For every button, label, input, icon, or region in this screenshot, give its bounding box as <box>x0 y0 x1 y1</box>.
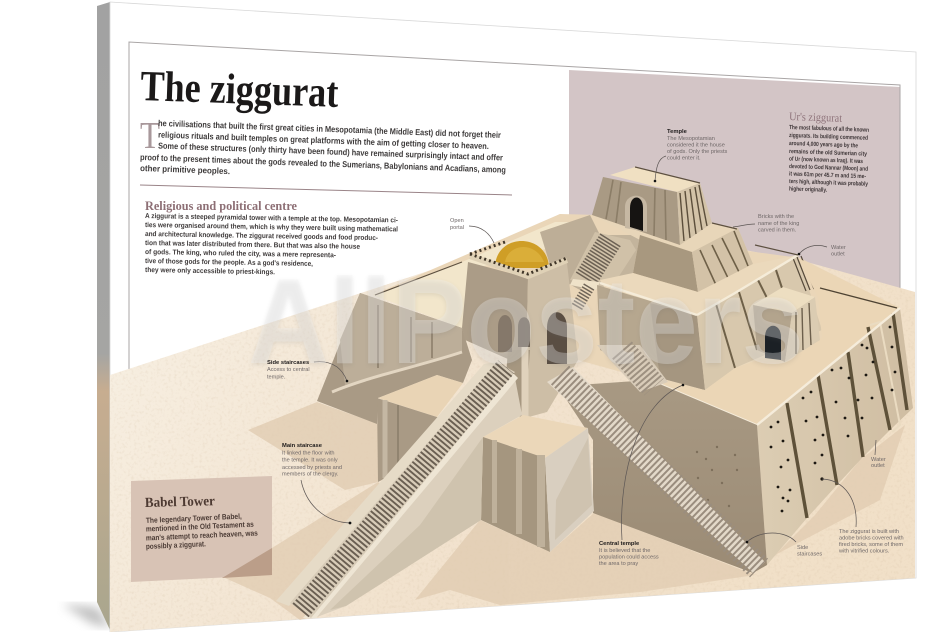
intro text: other primitive peoples. <box>140 163 230 176</box>
text block: Religious and political centre: A ziggurat is a steeped pyramidal tower with a temple at the top. Mesopotamian ci- <box>145 212 399 224</box>
label: Water outlet upper <box>798 245 846 258</box>
label: Water outlet upper: outlet <box>831 252 845 258</box>
label: adobe bricks: adobe bricks covered with <box>839 536 904 542</box>
portal block <box>753 287 820 362</box>
label: Side staircases right <box>746 533 822 558</box>
label: Bricks: Bricks with the <box>758 214 794 220</box>
text block: Ur's ziggurat: ters high, although it was probably <box>789 179 869 188</box>
intro text: religious rituals and built temples on great platforms with the aim of getting closer to heaven. <box>158 130 489 151</box>
ground shadows <box>225 402 905 620</box>
divider rule <box>140 185 512 195</box>
panel: Babel Tower: mentioned in the Old Testament as <box>146 520 254 533</box>
tier 3 terrace <box>600 255 820 390</box>
front central block <box>481 415 594 552</box>
middle stair walls <box>570 232 636 290</box>
main staircase <box>276 362 522 618</box>
tier 2 terrace <box>592 215 753 292</box>
inner frame <box>129 42 900 370</box>
tower arches <box>547 312 567 364</box>
text block: Religious and political centre: of gods. The king, who ruled the city, was a mere representa- <box>145 248 337 259</box>
drop cap: T <box>140 115 160 157</box>
heading: Religious and political centre: Religious and political centre <box>145 198 297 213</box>
intro text: he civilisations that built the first great cities in Mesopotamia (the Middle East) did not forget their <box>158 118 502 140</box>
label: Main staircase <box>282 443 351 524</box>
portal arch <box>765 326 781 360</box>
label: Bricks: name of the king <box>758 221 799 227</box>
watermark: AllPosters <box>248 255 804 391</box>
heading: Ur's ziggurat: Ur's ziggurat <box>789 111 843 125</box>
front right wall <box>560 380 767 573</box>
label: Side staircases left: Side staircases <box>267 360 309 366</box>
label: Temple: of gods. Only the priests <box>667 149 728 155</box>
golden dome <box>495 241 549 268</box>
label: Side staircases right: Side <box>797 545 808 551</box>
label: Bricks: carved in them. <box>758 228 797 234</box>
label: Water outlet upper: Water <box>831 245 846 251</box>
text block: Ur's ziggurat: of Ur (now known as Iraq). It was <box>789 157 864 165</box>
front wall holes <box>696 446 738 507</box>
temple arch <box>625 196 647 232</box>
text block: Religious and political centre: ties were organised around them, which is why they were built using mathematical <box>145 221 398 233</box>
panel: Babel Tower: possibly a ziggurat. <box>146 539 206 551</box>
intro text: proof to the present times about the gods revealed to the Sumerians, Babylonians and Acadians, among <box>140 152 506 175</box>
text block: Ur's ziggurat <box>789 111 869 194</box>
right wall <box>757 308 913 565</box>
intro text <box>140 115 506 176</box>
tier 3 front-left face <box>597 285 705 390</box>
text block: Ur's ziggurat: it was 61m per 45.7 m and 15 me- <box>789 172 866 180</box>
label: Central temple: the area to pray <box>599 561 638 567</box>
text block: Ur's ziggurat: ziggurats. Its building commenced <box>789 133 868 142</box>
main base terrace right <box>653 258 900 425</box>
text block: Ur's ziggurat: devoted to God Nannar (Moon) and <box>789 164 868 173</box>
upper tier left walls <box>540 215 600 290</box>
title: The ziggurat <box>140 63 340 117</box>
label: Bricks <box>733 214 799 234</box>
label: Open portal <box>450 218 494 243</box>
label: Side staircases right: staircases <box>797 552 822 558</box>
canvas side edge <box>97 2 110 630</box>
right main staircase <box>547 367 765 573</box>
battlements <box>470 256 567 276</box>
label: Main staircase: members of the clergy. <box>282 472 339 478</box>
watermark: AllPosters <box>248 253 804 389</box>
label: Main staircase: Main staircase <box>282 443 323 449</box>
text block: Ur's ziggurat: remains of the old Sumerian city <box>789 149 868 158</box>
tier 3 right face <box>697 255 822 390</box>
panel: Babel Tower <box>131 476 272 582</box>
middle stair treads <box>586 239 611 279</box>
text block: Religious and political centre: tive of those gods for the people. As a god's residence, <box>145 257 313 268</box>
label: adobe bricks: The ziggurat is built with <box>839 529 899 535</box>
tier 2 right face <box>692 228 753 292</box>
left wall <box>317 293 472 424</box>
text block: Ur's ziggurat: around 4,000 years ago by the <box>789 141 859 149</box>
label: Temple <box>654 129 728 182</box>
label: Central temple: It is believed that the <box>599 548 650 554</box>
tier 2 front-left face <box>633 235 698 292</box>
label: Side staircases left <box>267 360 348 382</box>
wall grooves <box>787 313 907 518</box>
label: Main staircase: accessed by priests and <box>282 465 342 471</box>
label: Central temple <box>599 384 684 567</box>
ziggurat illustration <box>276 167 913 618</box>
label: adobe bricks: fired bricks, some of them <box>839 542 903 548</box>
tower <box>462 241 578 418</box>
label: Main staircase: It linked the floor with <box>282 450 335 456</box>
panel: Ur's ziggurat background <box>569 70 900 300</box>
text block: Ur's ziggurat: The most fabulous of all the known <box>789 125 869 134</box>
left small block <box>377 375 463 482</box>
label: Temple: Temple <box>667 129 688 135</box>
label: Open portal: Open <box>450 218 464 224</box>
label: Temple: considered it the house <box>667 142 725 148</box>
label: Water outlet lower <box>871 440 886 469</box>
label: Central temple: population could access <box>599 554 659 560</box>
text block: Religious and political centre: tion that was later distributed from there. But that was also the house <box>145 239 360 251</box>
heading: Babel Tower: Babel Tower <box>145 494 215 511</box>
text block: Ur's ziggurat: higher originally. <box>789 187 827 194</box>
wall holes <box>770 326 896 512</box>
label: Temple: The Mesopotamian <box>667 136 715 142</box>
text block: Religious and political centre <box>145 212 399 276</box>
back terrace <box>373 214 900 425</box>
sand ground <box>110 214 915 632</box>
label: adobe bricks <box>822 479 904 554</box>
label: Water outlet lower: outlet <box>871 463 885 469</box>
label: Water outlet lower: Water <box>871 457 886 463</box>
label: Side staircases left: temple. <box>267 374 286 380</box>
label: Open portal: portal <box>450 225 464 231</box>
label: adobe bricks: with vitrified colours. <box>838 548 890 554</box>
panel: Babel Tower: man's attempt to reach heaven, was <box>146 528 258 542</box>
intro text: Some of these structures (only thirty have been found) have remained surprisingly intact and offer <box>158 141 504 163</box>
label: Central temple: Central temple <box>599 541 640 547</box>
label: Temple: could enter it. <box>667 156 701 162</box>
text block: Religious and political centre: and architectural knowledge. The ziggurat received goods and food produc- <box>145 230 379 242</box>
left cream terrace <box>373 222 590 328</box>
lower secondary stair <box>597 345 668 392</box>
temple <box>592 167 712 245</box>
panel shaded corner <box>222 548 272 578</box>
label: Main staircase: the temple. It was only <box>282 458 338 464</box>
text block: Religious and political centre: they were only accessible to priest-kings. <box>145 266 275 276</box>
sand texture <box>110 278 915 631</box>
label: Side staircases left: Access to central <box>267 367 310 373</box>
panel: Babel Tower: The legendary Tower of Babel, <box>146 512 242 525</box>
canvas shadow <box>62 604 112 628</box>
